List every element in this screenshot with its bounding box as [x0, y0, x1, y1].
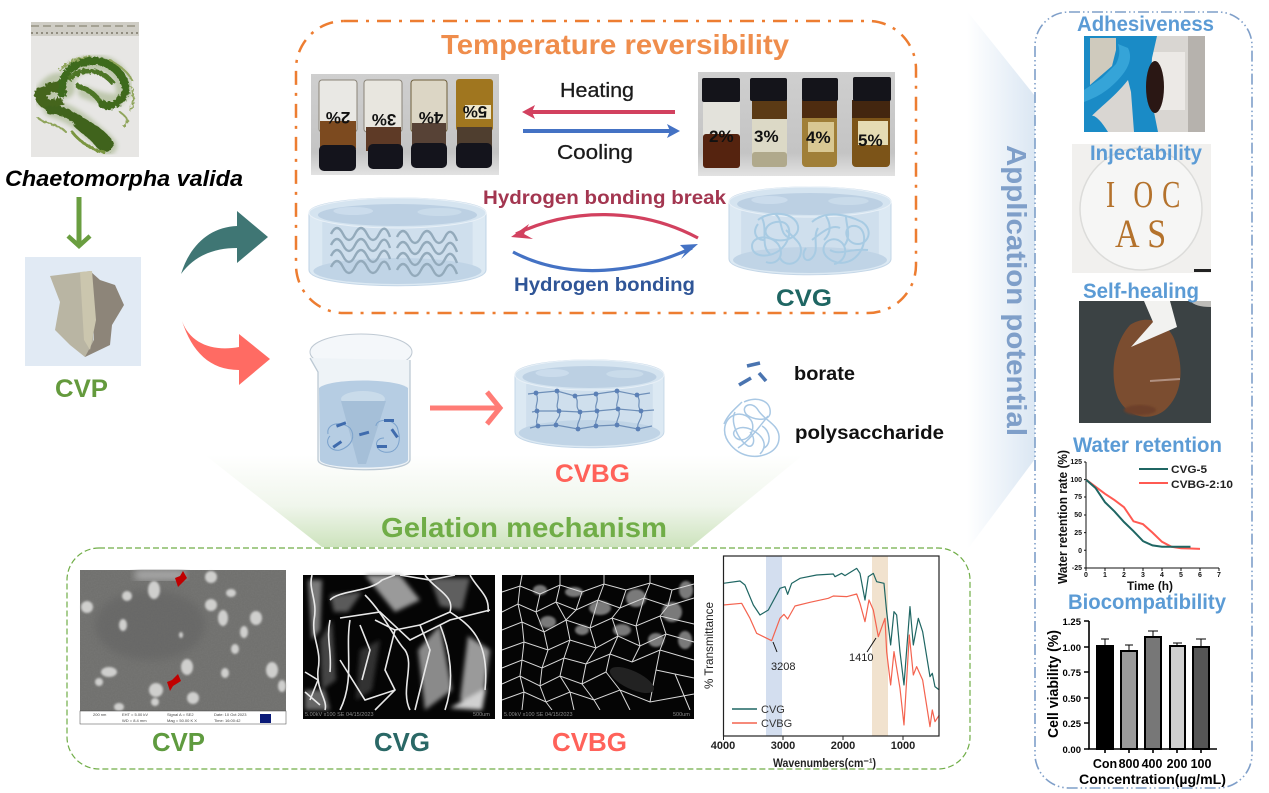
chart: water retention: -25 [1072, 565, 1082, 572]
chart: FTIR spectra: CVBG [761, 718, 792, 730]
photo: upright vials: 2% [709, 127, 734, 146]
arrow: to temperature reversibility [181, 211, 268, 274]
micrograph: CVP: Date: 10 Oct 2023 [214, 712, 247, 717]
photo: inverted vials: 2% [326, 108, 350, 127]
chart: cell viability bars: Con [1093, 757, 1117, 771]
arrow: hydrogen bonding [513, 244, 698, 271]
photo: inverted vials [311, 74, 499, 175]
chart: water retention [1056, 450, 1233, 593]
heading: water retention: Water retention [1073, 434, 1222, 457]
micrograph: CVP: WD = 8.4 mm [122, 718, 147, 723]
heading: gelation mechanism: Gelation mechanism [381, 512, 667, 543]
chart: water retention: CVBG-2:10 [1171, 479, 1233, 491]
photo: CVP powder piece [25, 257, 141, 366]
photo: upright vials: 3% [754, 127, 779, 146]
micrograph: CVBG: 500um [673, 712, 690, 718]
gel: CVBG network [515, 360, 664, 448]
icon: borate bars [739, 363, 766, 385]
photo: Chaetomorpha valida alga [31, 22, 139, 157]
label: borate: borate [794, 364, 855, 385]
gel: linear chains [309, 198, 486, 286]
chart: FTIR spectra: Wavenumbers(cm⁻¹) [773, 756, 876, 770]
gelation mechanism background band [205, 455, 803, 547]
photo: injectability: AS [1115, 213, 1166, 257]
label: polysaccharide: polysaccharide [795, 423, 944, 444]
micrograph: CVG: 5.00kV x100 SE 04/15/2023 [305, 712, 374, 718]
chart: water retention: CVG-5 [1171, 464, 1207, 476]
chart: water retention: 50 [1074, 512, 1082, 519]
chart: water retention: 25 [1074, 530, 1082, 537]
arrow: beaker to CVBG [430, 392, 500, 424]
chart: FTIR spectra: 4000 [711, 740, 735, 752]
chart: cell viability bars: 800 [1119, 757, 1139, 771]
heading: injectability: Injectability [1090, 142, 1202, 165]
heading: biocompatibility: Biocompatibility [1068, 591, 1226, 614]
label: CVBG center: CVBG [555, 460, 630, 488]
chart: cell viability bars: 0.00 [1062, 745, 1081, 756]
photo: adhesiveness [1084, 36, 1205, 132]
micrograph: CVG [303, 575, 495, 719]
label: CVP: CVP [55, 375, 108, 403]
chart: cell viability bars: 0.75 [1062, 668, 1082, 679]
micrograph: CVP: Time: 16:00:42 [214, 718, 241, 723]
label: CVG micrograph: CVG [374, 727, 430, 757]
chart: FTIR spectra: 2000 [831, 740, 855, 752]
micrograph: CVBG: 5.00kV x100 SE 04/15/2023 [504, 712, 572, 718]
chart: cell viability bars: 400 [1142, 757, 1162, 771]
chart: FTIR spectra: 3000 [771, 740, 795, 752]
label: CVG: CVG [776, 285, 832, 312]
chart: cell viability bars: 1.00 [1062, 643, 1081, 654]
micrograph: CVP [80, 570, 286, 724]
photo: injectability [1072, 144, 1211, 273]
chart: water retention: 100 [1070, 477, 1082, 484]
arrow: cooling [523, 124, 680, 138]
gel: CVG tangled chains [729, 187, 891, 275]
label: hydrogen bonding: Hydrogen bonding [514, 274, 695, 296]
arrow: heating [522, 105, 675, 119]
heading: temperature reversibility: Temperature reversibility [441, 29, 789, 60]
chart: water retention: 1 [1103, 572, 1107, 579]
chart: FTIR spectra: CVG [761, 704, 785, 716]
photo: injectability: IOC [1106, 174, 1180, 216]
chart: water retention: 7 [1217, 572, 1221, 579]
icon: beaker with vortex [310, 334, 412, 470]
label: heating: Heating [560, 79, 634, 102]
chart: water retention: 125 [1070, 459, 1082, 466]
arrow: hydrogen bonding break [511, 215, 698, 239]
chart: cell viability bars: 1.25 [1062, 617, 1082, 628]
chart: water retention: 6 [1198, 572, 1202, 579]
chart: FTIR spectra [702, 556, 939, 770]
arrow: alga to CVP [68, 197, 90, 246]
application potential background band [967, 11, 1035, 550]
arrow: to borate gel [182, 321, 270, 385]
photo: inverted vials: 5% [463, 102, 487, 121]
panel: application potential [1035, 12, 1252, 788]
chart: water retention: Time (h) [1127, 579, 1173, 593]
micrograph: CVBG [502, 575, 694, 719]
photo: inverted vials: 4% [419, 108, 443, 127]
chart: water retention: 3 [1141, 572, 1145, 579]
chart: cell viability bars: Concentration(µg/mL) [1079, 771, 1226, 787]
chart: water retention: Water retention rate (%) [1056, 450, 1070, 584]
photo: upright vials: 4% [806, 128, 831, 147]
photo: upright vials [698, 72, 895, 176]
micrograph: CVP: EHT = 5.00 kV [122, 712, 148, 717]
micrograph: CVP: Signal A = SE2 [167, 712, 194, 717]
chart: FTIR spectra: 1410 [849, 652, 873, 664]
chart: cell viability bars: 0.25 [1062, 719, 1082, 730]
chart: water retention: 4 [1160, 572, 1164, 579]
chart: water retention: 2 [1122, 572, 1126, 579]
chart: FTIR spectra: 1000 [891, 740, 915, 752]
label: CVBG micrograph: CVBG [552, 727, 627, 757]
micrograph: CVG: 500um [473, 712, 490, 718]
species name: Chaetomorpha valida [5, 166, 243, 191]
label: hydrogen bonding break: Hydrogen bonding break [483, 187, 726, 209]
photo: self-healing [1079, 301, 1211, 423]
chart: cell viability bars: 0.50 [1062, 694, 1081, 705]
chart: water retention: 75 [1074, 494, 1082, 501]
heading: application potential: Application potential [1001, 145, 1032, 436]
heading: adhesiveness: Adhesiveness [1077, 13, 1214, 36]
chart: cell viability bars: Cell viability (%) [1046, 630, 1062, 738]
icon: polysaccharide coil [724, 399, 779, 456]
chart: FTIR spectra: % Transmittance [702, 602, 716, 689]
chart: cell viability bars: 200 [1167, 757, 1187, 771]
chart: water retention: 5 [1179, 572, 1183, 579]
chart: cell viability bars [1046, 617, 1226, 787]
photo: inverted vials: 3% [372, 110, 396, 129]
micrograph: CVP: Mag = 50.00 K X [167, 718, 197, 723]
panel: gelation mechanism [67, 548, 970, 770]
photo: upright vials: 5% [858, 131, 883, 150]
chart: water retention: 0 [1084, 572, 1088, 579]
chart: water retention: 0 [1078, 548, 1082, 555]
label: cooling: Cooling [557, 141, 633, 164]
panel: temperature reversibility [296, 21, 916, 313]
heading: self-healing: Self-healing [1083, 280, 1199, 303]
chart: cell viability bars: 100 [1191, 757, 1211, 771]
label: CVP micrograph: CVP [152, 727, 205, 757]
micrograph: CVP: 200 nm [93, 712, 107, 717]
chart: FTIR spectra: 3208 [771, 661, 795, 673]
